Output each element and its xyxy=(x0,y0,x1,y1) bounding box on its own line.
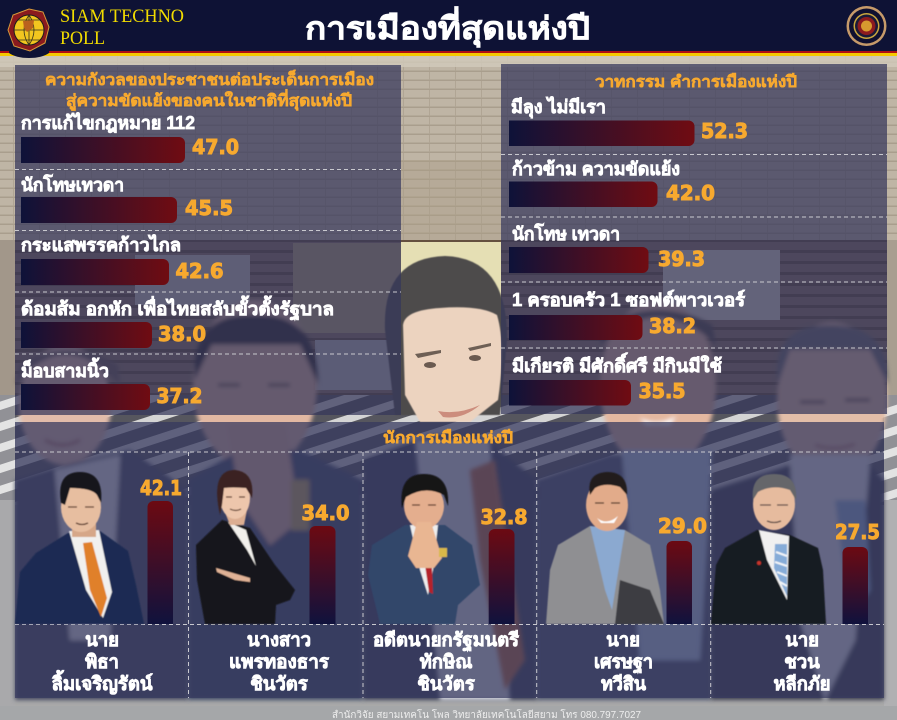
portrait: Thaksin xyxy=(368,474,480,624)
name: Chuan xyxy=(774,629,830,694)
value: 29.0: 29.0 xyxy=(658,514,707,538)
value: 42.1: 42.1 xyxy=(140,476,182,500)
bar: 32.8 xyxy=(489,529,514,624)
name: Pita: พิธา xyxy=(85,651,119,672)
row: 38.2 xyxy=(509,289,745,340)
ghost: Paetongtarn xyxy=(15,345,188,700)
row: 42.0 xyxy=(509,159,715,207)
panel heading: นักการเมืองแห่งปี xyxy=(383,428,513,447)
row: 47.0: การแก้ไขกฎหมาย 112 xyxy=(21,112,195,133)
value: 27.5: 27.5 xyxy=(835,520,880,544)
row: 47.0: 47.0 xyxy=(192,135,239,159)
value: 34.0: 34.0 xyxy=(302,501,350,525)
bar: 34.0 xyxy=(310,526,336,624)
name: Thaksin: อดีตนายกรัฐมนตรี xyxy=(373,629,519,652)
name: Chuan: นาย xyxy=(785,629,819,650)
row: 45.5 xyxy=(21,174,233,223)
title: การเมืองที่สุดแห่งปี xyxy=(305,6,590,48)
row: 47.0 xyxy=(21,112,239,163)
row: 42.0: 42.0 xyxy=(666,181,715,205)
portrait: Paetongtarn xyxy=(196,470,295,624)
name: Pita: ลิ้มเจริญรัตน์ xyxy=(52,670,153,695)
logo wordmark: SIAM TECHNO xyxy=(60,6,184,27)
name: Pita xyxy=(52,629,153,695)
ghost: Thaksin xyxy=(188,300,363,700)
row: 42.6: 42.6 xyxy=(176,259,224,283)
name: Paetongtarn: แพรทองธาร xyxy=(229,651,329,672)
row: 38.2: 1 ครอบครัว 1 ซอฟต์พาวเวอร์ xyxy=(512,289,745,310)
row: 52.3: 52.3 xyxy=(701,119,748,143)
name: Chuan: หลีกภัย xyxy=(774,673,830,694)
header bar: POLL xyxy=(60,28,105,49)
name: Chuan: ชวน xyxy=(784,651,820,672)
panel: political phrases chart xyxy=(501,72,887,406)
name: Paetongtarn: ชินวัตร xyxy=(250,673,308,694)
row: 52.3 xyxy=(509,96,748,146)
panel: politician of the year xyxy=(15,428,884,698)
row: 39.3 xyxy=(509,223,705,273)
logo badge: Siam Techno Poll xyxy=(8,9,49,58)
name: Srettha: เศรษฐา xyxy=(594,651,653,674)
row: 38.2: 38.2 xyxy=(649,314,696,338)
row: 45.5: นักโทษเทวดา xyxy=(21,174,124,195)
row: 35.5: 35.5 xyxy=(638,379,686,403)
value: 32.8: 32.8 xyxy=(480,505,528,529)
seal: university emblem xyxy=(846,6,886,46)
row: 42.0: ก้าวข้าม ความขัดแย้ง xyxy=(512,159,680,179)
portrait: Pita xyxy=(15,472,144,624)
name: Thaksin: ชินวัตร xyxy=(417,673,475,694)
name: Srettha: นาย xyxy=(606,629,640,650)
portrait: Srettha xyxy=(546,472,664,624)
row: 42.6 xyxy=(21,234,224,285)
name: Thaksin: ทักษิณ xyxy=(420,651,472,672)
portrait: Chuan xyxy=(711,474,826,624)
row: 35.5 xyxy=(509,352,722,406)
politician: Paetongtarn xyxy=(196,470,350,694)
row: 38.0: 38.0 xyxy=(158,322,206,346)
panel heading: วาทกรรม คำการเมืองแห่งปี xyxy=(595,72,797,91)
name: Paetongtarn: นางสาว xyxy=(247,629,311,650)
panel: political anxieties chart xyxy=(15,68,401,410)
row: 37.2: ม็อบสามนิ้ว xyxy=(21,357,109,381)
row: 35.5: มีเกียรติ มีศักดิ์ศรี มีกินมีใช้ xyxy=(512,352,722,376)
row: 42.6: กระแสพรรคก้าวไกล xyxy=(21,234,181,255)
row: 52.3: มีลุง ไม่มีเรา xyxy=(511,96,606,119)
header bar xyxy=(0,0,897,58)
row: 38.0 xyxy=(21,295,334,348)
ghost: Chuan xyxy=(711,322,888,700)
row: 39.3: 39.3 xyxy=(658,247,705,271)
name: Pita: นาย xyxy=(85,629,119,650)
panel: political anxieties chart: สู่ความขัดแย้งของคนในชาติที่สุดแห่งปี xyxy=(66,89,352,112)
politician: Thaksin xyxy=(368,474,528,694)
politician: Chuan xyxy=(711,474,880,694)
name: Paetongtarn xyxy=(229,629,329,694)
bar: 29.0 xyxy=(666,541,692,624)
row: 37.2 xyxy=(21,357,202,410)
ghost: Srettha xyxy=(537,300,716,700)
ghost: Pita xyxy=(363,256,537,700)
politician: Pita xyxy=(15,472,182,695)
panel heading: ความกังวลของประชาชนต่อประเด็นการเมือง xyxy=(45,68,374,89)
row: 39.3: นักโทษ เทวดา xyxy=(512,223,620,244)
bar: 27.5 xyxy=(842,547,868,624)
name: Srettha xyxy=(594,629,653,694)
name: Srettha: ทวีสิน xyxy=(601,673,646,694)
politician: Srettha xyxy=(546,472,707,694)
bar: 42.1 xyxy=(148,501,173,624)
row: 37.2: 37.2 xyxy=(156,384,202,408)
row: 45.5: 45.5 xyxy=(185,196,233,220)
row: 38.0: ด้อมส้ม อกหัก เพื่อไทยสลับขั้วตั้งรัฐบาล xyxy=(21,295,334,321)
name: Thaksin xyxy=(373,629,519,694)
